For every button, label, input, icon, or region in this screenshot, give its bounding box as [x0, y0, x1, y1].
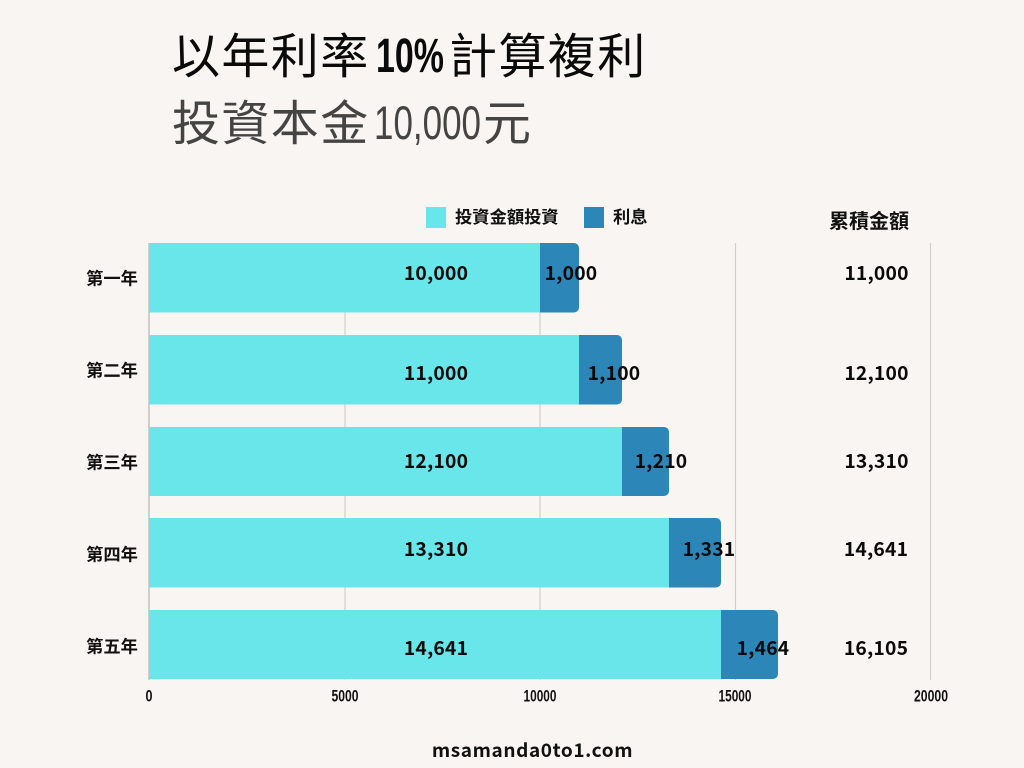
row: year 3: [86, 427, 909, 496]
row: year 5: 16,105: [844, 633, 908, 661]
row: year 4: 14,641: [844, 534, 908, 562]
row: year 3: 13,310: [844, 446, 909, 474]
row: year 1: 11,000: [844, 258, 909, 286]
row: year 4: [86, 518, 908, 588]
bar chart: [86, 243, 909, 679]
legend: [426, 203, 648, 228]
row: year 2: 12,100: [844, 358, 909, 386]
row: year 2: [86, 335, 909, 404]
legend: investment amount: 投資金額投資: [455, 203, 559, 228]
x axis labels: 10000: [524, 688, 556, 706]
title: [172, 17, 647, 87]
x axis labels: 0: [146, 688, 152, 706]
subtitle: 投資本金: [172, 84, 370, 154]
legend: interest: [584, 203, 648, 228]
row: year 5: 14,641: [404, 633, 468, 661]
row: year 4: 第四年: [86, 540, 138, 566]
x axis labels: 15000: [718, 688, 752, 706]
subtitle: 10,000: [374, 96, 481, 149]
legend: interest: 利息: [613, 203, 648, 228]
row: year 1: 10,000: [404, 258, 468, 286]
x axis labels: 20000: [914, 688, 948, 706]
row: year 5: 第五年: [86, 632, 138, 658]
title: 以年利率: [172, 17, 370, 87]
x axis labels: [146, 688, 948, 706]
row: year 1: 第一年: [86, 264, 138, 290]
column heading: cumulative amount: 累積金額: [829, 205, 909, 234]
row: year 2: 11,000: [404, 358, 468, 386]
subtitle: 元: [483, 84, 531, 154]
row: year 3: 第三年: [86, 448, 138, 474]
row: year 4: 1,331: [683, 534, 735, 562]
row: year 4: 13,310: [404, 534, 468, 562]
row: year 3: 12,100: [404, 446, 468, 474]
row: year 5: [86, 610, 908, 679]
row: year 3: 1,210: [635, 446, 687, 474]
subtitle: [172, 84, 531, 154]
title: 計算複利: [449, 17, 647, 87]
grid lines: [149, 243, 930, 680]
title: 10%: [376, 30, 444, 83]
footer url: msamanda0to1.com: [432, 736, 633, 763]
row: year 2: 第二年: [86, 356, 138, 382]
x axis labels: 5000: [332, 688, 358, 706]
row: year 1: [86, 243, 909, 312]
row: year 1: 1,000: [545, 258, 597, 286]
row: year 2: 1,100: [588, 358, 640, 386]
row: year 5: 1,464: [737, 633, 789, 661]
